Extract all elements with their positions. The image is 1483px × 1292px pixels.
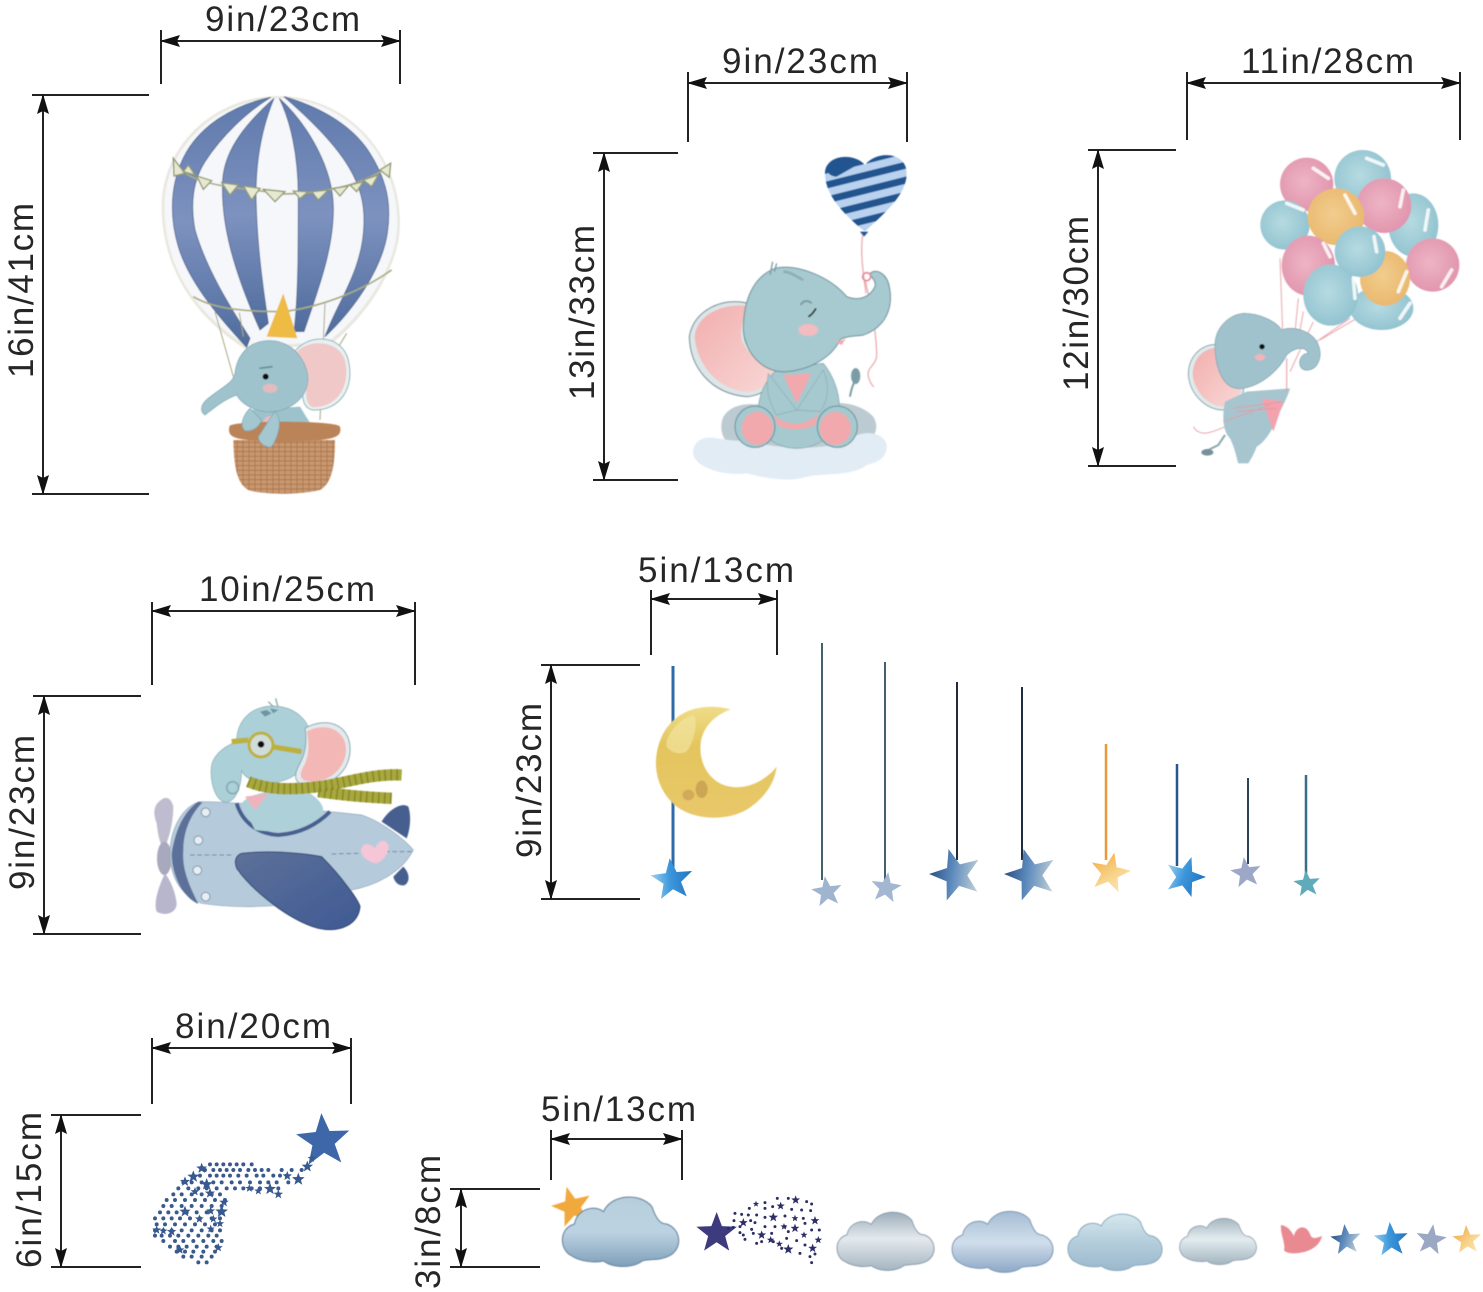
label: 5in/13cm: 5in/13cm (638, 551, 794, 590)
hanging star: pale blue 2 (869, 662, 903, 903)
dimension: balloons height 12in/30cm (1057, 150, 1176, 466)
dimension: balloon width 9in/23cm (161, 0, 400, 84)
icon: yellow star (1452, 1224, 1482, 1253)
hanging star: bright blue (1161, 764, 1210, 899)
label: 16in/41cm: 16in/41cm (2, 203, 41, 378)
label: 9in/23cm: 9in/23cm (510, 703, 549, 858)
dimension: balloons width 11in/28cm (1187, 42, 1460, 140)
icon: cloud 5 (1180, 1218, 1256, 1265)
hanging star: navy 1 (924, 682, 987, 903)
dimension: airplane height 9in/23cm (3, 696, 141, 934)
icon: cloud 3 (952, 1211, 1053, 1272)
illustration: shooting star with star trail (152, 1111, 351, 1262)
icon: pink bird (1281, 1225, 1322, 1253)
dimension: cloud width 5in/13cm (541, 1090, 696, 1180)
icon: cloud 1 (562, 1197, 679, 1266)
label: 10in/25cm: 10in/25cm (199, 570, 375, 609)
dimension: moon width 5in/13cm (638, 551, 794, 655)
label: 13in/33cm: 13in/33cm (563, 225, 602, 400)
icon: orange star behind cloud (547, 1182, 596, 1229)
icon: grey blue star (1414, 1222, 1448, 1255)
icon: cloud 4 (1068, 1214, 1162, 1270)
illustration: elephant on cloud with heart balloon (689, 147, 913, 479)
label: 6in/15cm: 6in/15cm (10, 1112, 49, 1268)
hanging star: blue, with moon (649, 666, 695, 900)
hanging star: grey blue (1229, 778, 1263, 888)
icon: navy star (1329, 1222, 1362, 1254)
label: 9in/23cm: 9in/23cm (722, 42, 878, 81)
dimension: heart balloon width 9in/23cm (688, 42, 907, 142)
icon: cloud 2 (837, 1212, 934, 1270)
dimension: balloon height 16in/41cm (2, 95, 149, 494)
illustration: hot air balloon with elephant (162, 96, 400, 494)
hanging star: orange (1087, 744, 1134, 894)
label: 9in/23cm: 9in/23cm (205, 0, 360, 39)
hanging star: navy 2 (999, 687, 1062, 903)
hanging star: teal (1292, 775, 1321, 897)
label: 12in/30cm: 12in/30cm (1057, 216, 1096, 391)
label: 9in/23cm: 9in/23cm (3, 735, 42, 890)
label: 11in/28cm: 11in/28cm (1241, 42, 1414, 81)
illustration: elephant with balloon bunch (1188, 150, 1459, 463)
illustration: small purple shooting star (696, 1195, 822, 1263)
label: 8in/20cm: 8in/20cm (175, 1007, 331, 1046)
icon: crescent moon (656, 707, 777, 818)
illustration: elephant in airplane (154, 698, 413, 930)
dimension: moon height 9in/23cm (510, 665, 640, 899)
dimension: shooting star height 6in/15cm (10, 1112, 141, 1268)
hanging star: pale blue 1 (810, 643, 844, 907)
label: 3in/8cm: 3in/8cm (409, 1155, 448, 1289)
dimension: heart balloon height 13in/33cm (563, 153, 678, 480)
dimension: cloud height 3in/8cm (409, 1155, 540, 1289)
dimension: airplane width 10in/25cm (152, 570, 415, 685)
label: 5in/13cm: 5in/13cm (541, 1090, 696, 1129)
dimension: shooting star width 8in/20cm (152, 1007, 351, 1104)
icon: bright blue star (1373, 1221, 1409, 1256)
